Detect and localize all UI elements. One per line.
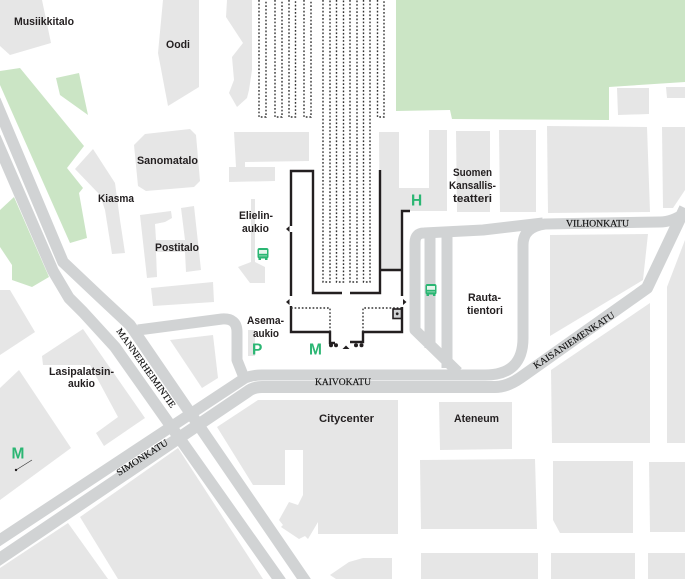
transport letters: M bbox=[12, 446, 24, 462]
railway tracks bbox=[259, 0, 384, 282]
place labels: Kiasma bbox=[98, 193, 135, 205]
metro pointer bbox=[15, 460, 32, 471]
transport letters: M bbox=[309, 342, 322, 358]
place labels: Oodi bbox=[166, 39, 190, 51]
place labels: Asema- bbox=[247, 315, 284, 327]
transport letters bbox=[12, 192, 422, 462]
place labels: aukio bbox=[253, 328, 279, 340]
entrance markers bbox=[286, 226, 406, 349]
place labels bbox=[14, 16, 503, 425]
street names: MANNERHEIMINTIE bbox=[114, 327, 177, 410]
place labels: teatteri bbox=[453, 193, 492, 205]
place labels: Ateneum bbox=[454, 413, 499, 425]
street names bbox=[114, 220, 629, 479]
place labels: Musiikkitalo bbox=[14, 16, 74, 28]
icon: bus Rautatientori bbox=[426, 284, 436, 296]
place labels: Kansallis- bbox=[449, 180, 496, 192]
place labels: Rauta- bbox=[468, 292, 501, 304]
railway station outline bbox=[286, 170, 410, 349]
green areas bbox=[0, 0, 685, 287]
place labels: Postitalo bbox=[155, 242, 199, 254]
place labels: aukio bbox=[68, 378, 95, 390]
place labels: Citycenter bbox=[319, 413, 375, 425]
icon: square symbol bbox=[393, 309, 402, 318]
place labels: Sanomatalo bbox=[137, 155, 198, 167]
place labels: Lasipalatsin- bbox=[49, 366, 114, 378]
street names: SIMONKATU bbox=[115, 438, 170, 479]
place labels: aukio bbox=[242, 223, 269, 235]
transport letters: H bbox=[411, 192, 422, 210]
icon: bus Elielinaukio bbox=[258, 248, 268, 260]
street names: KAISANIEMENKATU bbox=[532, 311, 617, 372]
place labels: Elielin- bbox=[239, 210, 273, 222]
place labels: tientori bbox=[467, 305, 503, 317]
street names: VILHONKATU bbox=[566, 220, 629, 230]
place labels: Suomen bbox=[453, 167, 492, 179]
street names: KAIVOKATU bbox=[315, 378, 371, 388]
transport letters: P bbox=[252, 342, 262, 358]
